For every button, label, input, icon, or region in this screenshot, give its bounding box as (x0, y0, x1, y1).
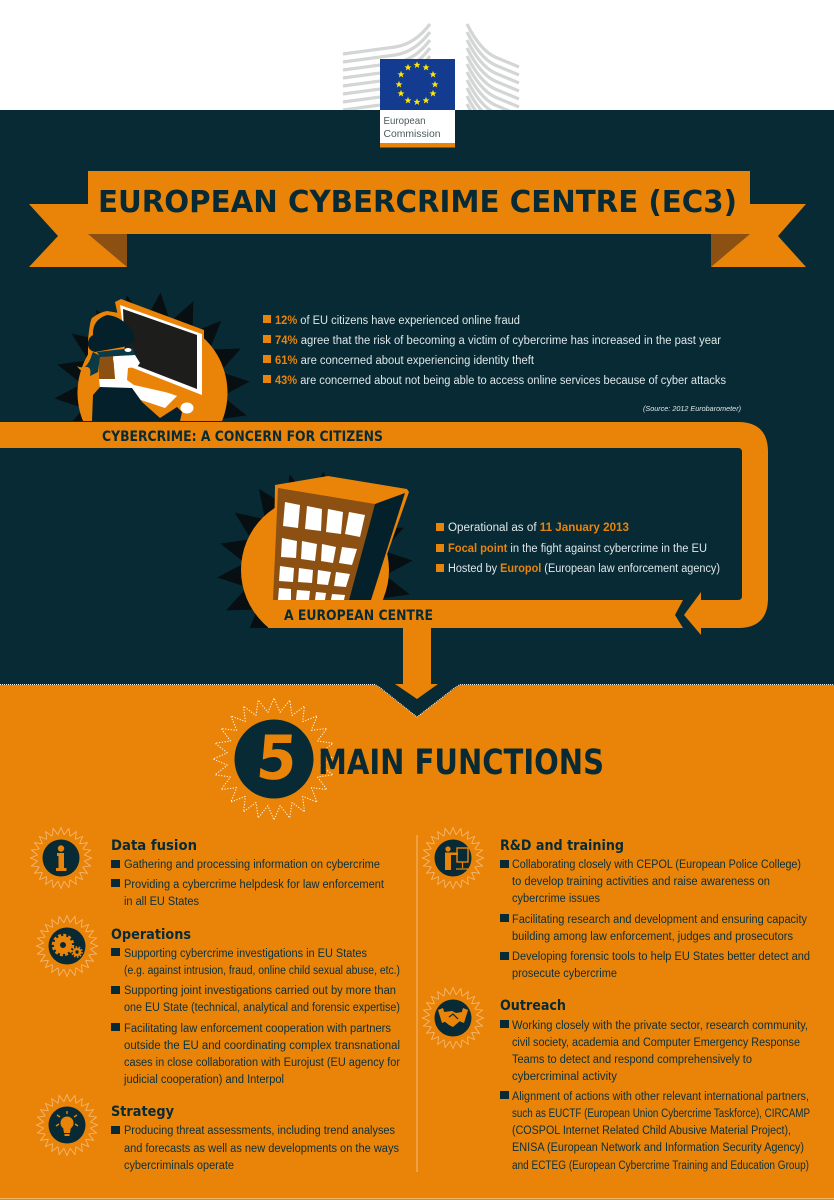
panel: outreach: Alignment of actions with other relevant international partners, (512, 1091, 809, 1103)
white header background (0, 0, 834, 111)
panel: R&D and training (500, 838, 810, 980)
panel: R&D and training: Facilitating research and development and ensuring capacity (512, 914, 807, 926)
panel: strategy: Producing threat assessments, including trend analyses (124, 1125, 395, 1137)
panel: strategy (111, 1104, 399, 1172)
source note: (Source: 2012 Eurobarometer) (643, 404, 741, 413)
heading: a european centre: A EUROPEAN CENTRE (284, 608, 433, 624)
badge: number 5 (213, 698, 335, 820)
illustration: cybercriminal at computer (54, 292, 250, 421)
panel: operations: Facilitating law enforcement cooperation with partners (124, 1023, 391, 1035)
heading: cybercrime: CYBERCRIME: A CONCERN FOR CITIZENS (102, 429, 383, 445)
icon: gears (36, 916, 98, 976)
centre facts list: Operational as of 11 January 2013 (448, 522, 629, 534)
panel: R&D and training: R&D and training (500, 838, 624, 854)
panel: R&D and training: to develop training activities and raise awareness on (512, 876, 770, 888)
panel: operations (111, 927, 400, 1086)
panel: data fusion: Data fusion (111, 838, 197, 854)
arrow down (395, 628, 438, 699)
icon: handshake (422, 988, 484, 1048)
column divider (416, 835, 418, 1172)
title banner: EUROPEAN CYBERCRIME CENTRE (EC3) (98, 185, 737, 220)
panel: R&D and training: Collaborating closely with CEPOL (European Police College) (512, 859, 801, 871)
panel: strategy: and forecasts as well as new developments on the ways (124, 1143, 399, 1155)
lower ribbon band (266, 600, 683, 628)
panel: outreach: Outreach (500, 998, 566, 1014)
icon: light bulb (36, 1094, 98, 1156)
panel: outreach: civil society, academia and Computer Emergency Response (512, 1037, 800, 1049)
statistics list: 74% agree that the risk of becoming a victim of cybercrime has increased in the past year (275, 335, 721, 347)
statistics list: 43% are concerned about not being able to access online services because of cyber attacks (275, 375, 726, 387)
European Commission logo: European (384, 115, 426, 127)
panel: outreach: ENISA (European Network and Information Security Agency) (512, 1142, 804, 1154)
panel: strategy: Strategy (111, 1104, 174, 1120)
panel: outreach: (COSPOL Internet Related Child Abusive Material Project), (512, 1125, 791, 1137)
orange lower section (0, 685, 834, 1200)
panel: outreach (500, 998, 810, 1172)
panel: outreach: Teams to detect and respond comprehensively to (512, 1054, 752, 1066)
panel: strategy: cybercriminals operate (124, 1160, 234, 1172)
panel: operations: cases in close collaboration with Eurojust (EU agency for (124, 1057, 400, 1069)
illustration: European Centre building (218, 472, 412, 628)
orange ribbon (0, 422, 768, 635)
navy background (0, 110, 834, 722)
panel: operations: Supporting cybercrime investigations in EU States (124, 948, 367, 960)
panel: R&D and training: building among law enforcement, judges and prosecutors (512, 931, 793, 943)
heading: main functions: MAIN FUNCTIONS (318, 743, 604, 783)
centre facts list: Hosted by Europol (European law enforcement agency) (448, 563, 720, 575)
panel: operations: Operations (111, 927, 191, 943)
panel: data fusion (111, 838, 385, 908)
panel: data fusion: Providing a cybercrime helpdesk for law enforcement (124, 879, 385, 891)
panel: operations: (e.g. against intrusion, fraud, online child sexual abuse, etc.) (124, 965, 400, 977)
statistics list: 12% of EU citizens have experienced online fraud (275, 315, 520, 327)
panel: R&D and training: cybercrime issues (512, 893, 600, 905)
panel: outreach: Working closely with the private sector, research community, (512, 1020, 808, 1032)
centre facts list: Focal point in the fight against cybercrime in the EU (448, 543, 707, 555)
icon: information (30, 828, 92, 888)
statistics list (263, 315, 726, 387)
European Commission logo: Commission (384, 128, 441, 140)
centre facts list (436, 522, 720, 575)
statistics list: 61% are concerned about experiencing identity theft (275, 355, 535, 367)
panel: operations: outside the EU and coordinating complex transnational (124, 1040, 400, 1052)
European Commission logo (380, 59, 455, 148)
panel: operations: one EU State (technical, analytical and forensic expertise) (124, 1002, 400, 1014)
panel: outreach: cybercriminal activity (512, 1071, 617, 1083)
panel: operations: judicial cooperation) and Interpol (123, 1074, 284, 1086)
panel: R&D and training: Developing forensic tools to help EU States better detect and (512, 951, 810, 963)
panel: data fusion: in all EU States (124, 896, 199, 908)
badge: number 5: 5 (254, 723, 300, 794)
panel: data fusion: Gathering and processing information on cybercrime (124, 859, 380, 871)
icon: Berlaymont building (343, 24, 519, 147)
icon: training presenter (422, 828, 484, 888)
title banner (29, 171, 806, 267)
panel: operations: Supporting joint investigations carried out by more than (124, 985, 396, 997)
panel: R&D and training: prosecute cybercrime (512, 968, 617, 980)
